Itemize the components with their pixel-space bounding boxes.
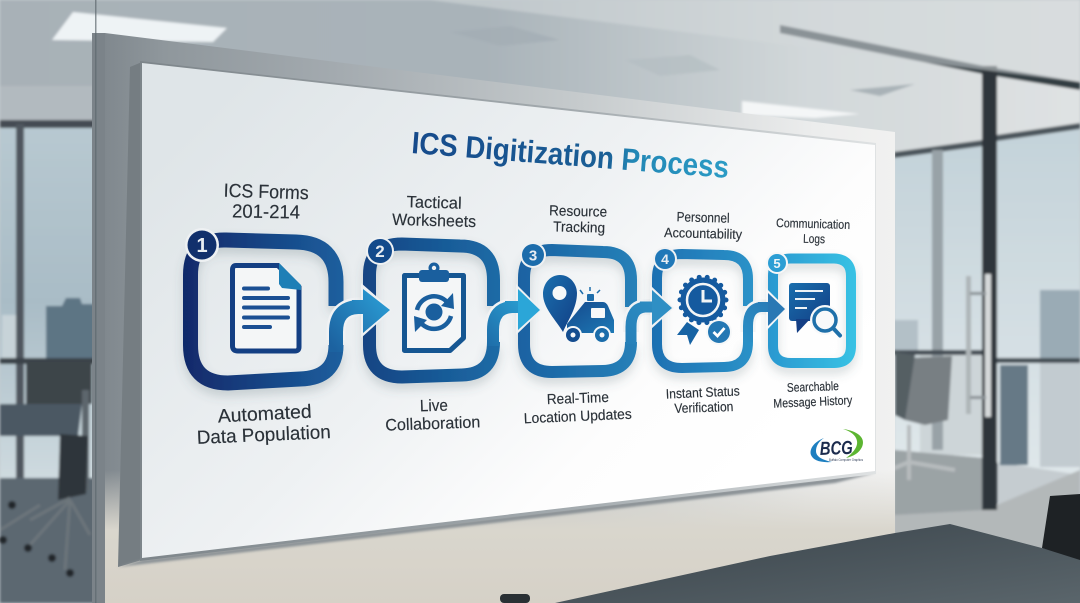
arrowhead into step 3: [505, 284, 542, 335]
step 1 badge: [185, 228, 219, 262]
step 4: Personnel Accountability: [640, 209, 770, 368]
caption: Live Collaboration: Live: [420, 397, 448, 415]
BCG logo: BCG: [819, 438, 853, 460]
step 2 heading: [392, 193, 476, 231]
feature wall: [92, 33, 895, 603]
step 4 heading: [664, 209, 743, 242]
glass edge line: [95, 0, 96, 603]
step 4 heading: Accountability: [664, 225, 743, 242]
foreground black chair: [1042, 494, 1080, 560]
right ceiling beam: [780, 25, 1080, 90]
left conference table and chairs: [0, 362, 92, 577]
step 4 frame: [657, 254, 748, 368]
left window: [0, 120, 100, 484]
icon: message with magnifier: [789, 283, 840, 336]
step 3 heading: Tracking: [553, 219, 605, 237]
caption: Automated Data Population: [196, 402, 331, 449]
white process board: [140, 61, 876, 561]
foreground conference table: [500, 524, 1080, 603]
BCG logo: [811, 429, 863, 462]
caption: Live Collaboration: [385, 397, 481, 435]
caption: Automated Data Population: Automated: [217, 402, 312, 427]
title: ICS Digitization Process: [410, 125, 730, 185]
step 3: Resource Tracking: [505, 203, 654, 372]
step 1 heading: [223, 181, 309, 224]
glass door column: [982, 66, 997, 510]
caption: Real-Time Location Updates: Real-Time: [547, 390, 609, 408]
step 5 heading: Communication: [776, 216, 850, 232]
step 3 heading: Resource: [549, 203, 607, 221]
caption: Real-Time Location Updates: [524, 390, 632, 427]
step 1: ICS Forms: [185, 181, 368, 383]
left floor: [0, 478, 100, 603]
arrow to step 5: [748, 307, 770, 342]
icon: clipboard with sync arrows: [404, 262, 464, 350]
arrow to step 2: [336, 307, 368, 352]
caption: Searchable Message History: [773, 379, 853, 411]
step 3 heading: [549, 203, 607, 237]
step 5 heading: Logs: [803, 232, 825, 246]
step 5: Communication Logs: [758, 216, 851, 363]
right window: [894, 123, 1080, 475]
arrow to step 4: [631, 307, 654, 344]
step 1 frame: [190, 240, 336, 383]
caption: Real-Time Location Updates: Location Updates: [524, 407, 632, 427]
step 2 heading: Tactical: [406, 193, 462, 213]
step 1 heading: ICS Forms: [223, 181, 309, 204]
caption: Instant Status Verification: [666, 383, 740, 416]
icon: location pin and ambulance: [543, 275, 614, 344]
door handles: [966, 274, 991, 417]
right floor: [894, 450, 1080, 603]
step 2 heading: Worksheets: [392, 211, 476, 231]
arrowhead into step 5: [758, 288, 787, 331]
step 5 badge: [766, 252, 788, 274]
step 3 badge: 3: [529, 248, 537, 264]
step 2 badge: [366, 237, 394, 265]
step 2 badge: 2: [375, 242, 385, 261]
glass reflections above wall: [430, 0, 1080, 82]
step 3 badge: [520, 242, 546, 268]
step 1 heading: 201-214: [232, 201, 301, 224]
caption: Searchable Message History: Searchable: [787, 379, 839, 395]
icon: rosette clock with check: [677, 277, 732, 345]
step 4 badge: 4: [661, 251, 669, 267]
ceiling light panel: [52, 12, 227, 42]
step 5 badge: 5: [773, 256, 781, 271]
step 2: Tactical Worksheets: [352, 193, 520, 377]
step 1 badge: 1: [196, 235, 208, 257]
board shadow: [118, 62, 142, 567]
step 2 frame: [370, 244, 494, 377]
arrowhead into step 2: [352, 283, 392, 338]
caption: Live Collaboration: Collaboration: [385, 413, 481, 435]
step 5 heading: [776, 216, 850, 246]
caption: Instant Status Verification: Verification: [674, 399, 734, 416]
board bottom shadow: [118, 473, 875, 567]
right chair: [890, 352, 955, 480]
step 3 frame: [524, 250, 631, 372]
BCG logo: Buffalo Computer Graphics: [829, 458, 863, 462]
step 5 frame: [773, 258, 851, 363]
caption: Automated Data Population: Data Population: [196, 422, 331, 449]
caption: Searchable Message History: Message History: [773, 393, 853, 411]
step 4 heading: Personnel: [676, 209, 730, 226]
feature caption row: [196, 379, 853, 449]
arrowhead into step 4: [640, 285, 674, 330]
arrow to step 3: [493, 307, 520, 346]
icon: document: [232, 263, 301, 351]
step 4 badge: [653, 247, 677, 271]
ceiling: [0, 0, 1080, 200]
left soffit: [0, 86, 100, 122]
caption: Instant Status Verification: Instant Status: [666, 383, 740, 402]
